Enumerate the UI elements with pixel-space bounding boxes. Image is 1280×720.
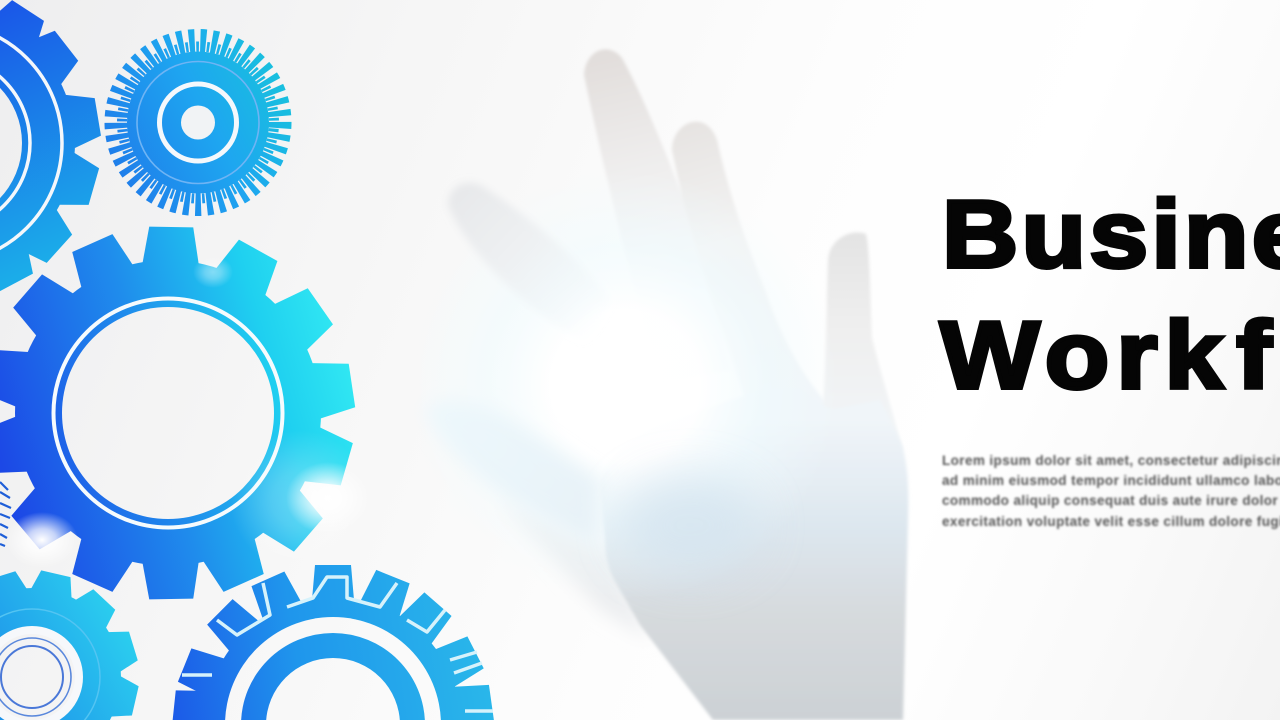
light flares on gears bbox=[6, 256, 370, 570]
title bbox=[938, 181, 1280, 409]
illustration: gears and translucent hand bbox=[0, 0, 910, 720]
hand: palm and wrist bbox=[600, 388, 908, 720]
hand: soft shadow under the lower-left finger bbox=[500, 500, 650, 640]
gear: large central gear bbox=[0, 215, 370, 610]
gear: bottom-left gear with ribbed inner rings bbox=[0, 570, 139, 720]
hand: faded upper-left finger bbox=[448, 183, 612, 345]
gear: bottom gear with outlined teeth bbox=[165, 560, 500, 720]
hand: index and middle fingers bbox=[584, 49, 833, 440]
hand: blue shading on palm edge bbox=[620, 475, 760, 575]
hand: translucent open hand with glow bbox=[410, 49, 908, 720]
gear: small spiked gear with concentric rings bbox=[116, 40, 280, 205]
hand: central light glow bbox=[410, 170, 840, 600]
hand: thumb bbox=[820, 232, 903, 450]
gear: fragment of dark spiked gear at left edge bbox=[0, 482, 11, 546]
gears cluster bbox=[0, 0, 500, 720]
hand: faded lower-left finger bbox=[425, 400, 600, 545]
gear: top-left large gear bbox=[0, 0, 101, 292]
body text block bbox=[941, 453, 1280, 530]
